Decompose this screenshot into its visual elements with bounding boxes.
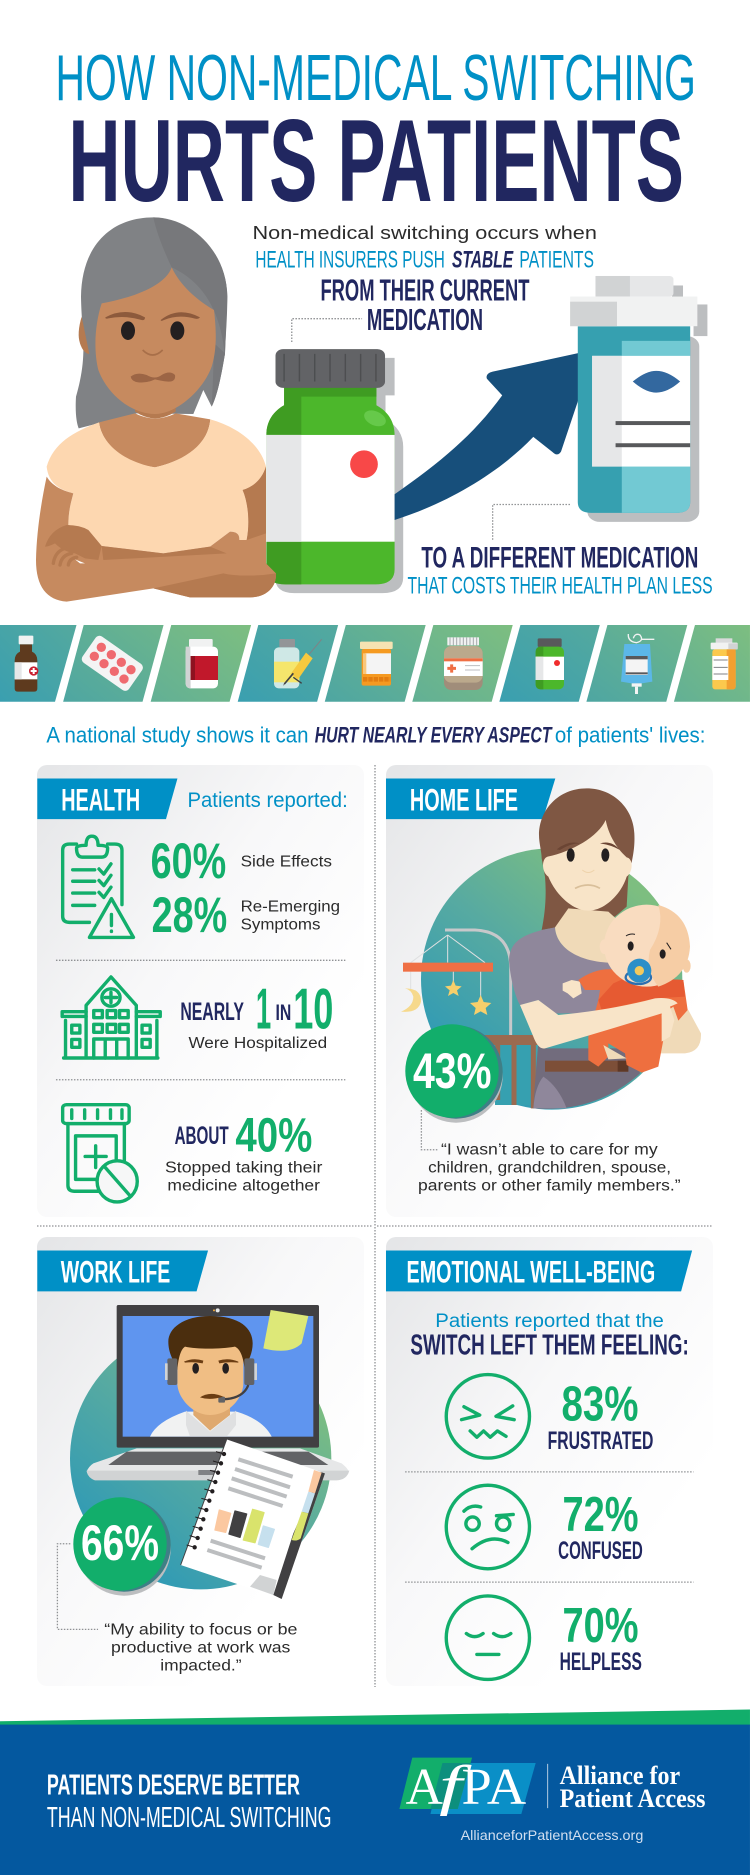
stat: side effects: 60% [151, 833, 226, 889]
stat: frustrated [548, 1377, 653, 1454]
hero: medication switch illustration [36, 217, 713, 602]
quote: home life [418, 1140, 681, 1194]
quote: home life: “I wasn’t able to care for my [441, 1140, 658, 1158]
icon: brown bottle [15, 636, 38, 692]
illustration: laptop, video call and notebook [70, 1305, 349, 1599]
logo: AfPA: A [406, 1758, 443, 1816]
intro text: MEDICATION [367, 303, 483, 337]
stat: stopped medicine: medicine altogether [167, 1176, 320, 1194]
text: patients reported: Patients reported: [187, 789, 348, 812]
stat badge: 43%: 43% [413, 1043, 492, 1099]
icon: white and red bottle [186, 639, 218, 688]
intro text [253, 224, 597, 337]
stat: re-emerging symptoms: Symptoms [241, 915, 321, 933]
panel: health [37, 778, 348, 1202]
heading: health [37, 778, 177, 819]
stat: confused: 72% [562, 1487, 639, 1542]
footer message: THAN NON-MEDICAL SWITCHING [47, 1801, 331, 1833]
stat: hospitalized: 1 [256, 976, 271, 1041]
stat: hospitalized: IN [276, 1001, 291, 1025]
text: switch left them feeling: Patients reported that the [435, 1310, 664, 1332]
medication strip [0, 625, 750, 702]
stat: frustrated: FRUSTRATED [548, 1427, 653, 1454]
icon: helpless face [446, 1596, 529, 1679]
icon: pill blister [80, 634, 145, 693]
quote: home life: children, grandchildren, spouse, [428, 1158, 671, 1176]
illustration: mother and baby [401, 788, 701, 1110]
stat: side effects: Side Effects [241, 852, 332, 870]
icon: frustrated face [446, 1375, 529, 1458]
heading: home life [386, 778, 555, 819]
stat: side effects [151, 833, 332, 889]
icon: yellow bottle [711, 638, 738, 689]
stat: hospitalized: 10 [293, 976, 333, 1041]
intro text: STABLE [452, 245, 514, 273]
stat: re-emerging symptoms [152, 887, 340, 943]
stat: helpless [560, 1598, 642, 1675]
logo: AfPA [399, 1755, 706, 1844]
icon: IV bag [621, 634, 654, 694]
heading: emotional well-being [386, 1250, 692, 1291]
stat: frustrated: 83% [562, 1377, 639, 1432]
text: switch left them feeling [410, 1310, 689, 1361]
quote: work life: “My ability to focus or be [104, 1620, 298, 1638]
stat: confused: CONFUSED [558, 1537, 643, 1565]
footer message: PATIENTS DESERVE BETTER [47, 1768, 300, 1801]
logo: AfPA: Patient Access [560, 1785, 706, 1813]
icon: jar [444, 637, 483, 690]
icon: confused face [446, 1485, 529, 1569]
intro text: FROM THEIR CURRENT [320, 273, 530, 308]
footer [0, 1710, 750, 1875]
study intro line: HURT NEARLY EVERY ASPECT [315, 724, 553, 748]
arrow [395, 351, 593, 520]
footer message [47, 1768, 331, 1833]
title [55, 41, 696, 226]
panel: work life [37, 1250, 349, 1674]
quote: work life: impacted.” [160, 1656, 242, 1674]
panel: emotional well-being [386, 1250, 694, 1679]
icon: green medicine bottle [266, 349, 403, 593]
icon: orange bottle [360, 642, 393, 686]
intro text: Non-medical switching occurs when [253, 224, 597, 243]
study intro line [46, 724, 705, 748]
quote: work life: productive at work was [111, 1638, 290, 1656]
stat: hospitalized [180, 976, 333, 1052]
stat: stopped medicine [165, 1109, 323, 1194]
icon: medicine bottle with prohibition sign [63, 1105, 137, 1202]
stat: re-emerging symptoms: Re-Emerging [241, 897, 340, 915]
stat: helpless: 70% [562, 1598, 639, 1653]
stat: hospitalized: NEARLY [180, 998, 244, 1025]
heading: home life: HOME LIFE [410, 783, 518, 818]
intro text: PATIENTS [519, 245, 594, 273]
stat: re-emerging symptoms: 28% [152, 887, 227, 943]
heading: health: HEALTH [61, 783, 140, 818]
stat: helpless: HELPLESS [560, 1648, 642, 1675]
stat: stopped medicine: ABOUT [175, 1121, 229, 1149]
stat: confused [558, 1487, 643, 1565]
text: different medication [408, 540, 713, 599]
stat: stopped medicine: Stopped taking their [165, 1158, 323, 1176]
study intro line: of patients' lives: [555, 724, 705, 748]
stat: stopped medicine: 40% [235, 1109, 312, 1163]
icon: blue pill bottle [570, 276, 707, 522]
illustration: worried woman [36, 217, 276, 602]
heading: work life [37, 1250, 208, 1291]
icon: hospital [62, 977, 160, 1058]
logo: AfPA: f [439, 1755, 472, 1817]
panel: home life [386, 778, 701, 1194]
icon: vial and syringe [274, 639, 322, 688]
logo: AfPA: PA [462, 1758, 527, 1816]
stat badge: 43% [405, 1024, 503, 1123]
quote: home life: parents or other family members.” [418, 1176, 681, 1194]
logo: AfPA: Alliance for [560, 1762, 680, 1790]
heading: work life: WORK LIFE [61, 1255, 170, 1290]
icon: clipboard with warning [63, 836, 133, 937]
stat: hospitalized: Were Hospitalized [188, 1034, 327, 1052]
logo: AfPA: AllianceforPatientAccess.org [461, 1828, 643, 1844]
study intro line: A national study shows it can [46, 724, 309, 748]
stat badge: 66% [73, 1497, 171, 1596]
intro text: HEALTH INSURERS PUSH [255, 245, 445, 273]
icon: green bottle [536, 638, 564, 689]
stat badge: 66%: 66% [81, 1515, 159, 1571]
quote: work life [104, 1620, 298, 1674]
